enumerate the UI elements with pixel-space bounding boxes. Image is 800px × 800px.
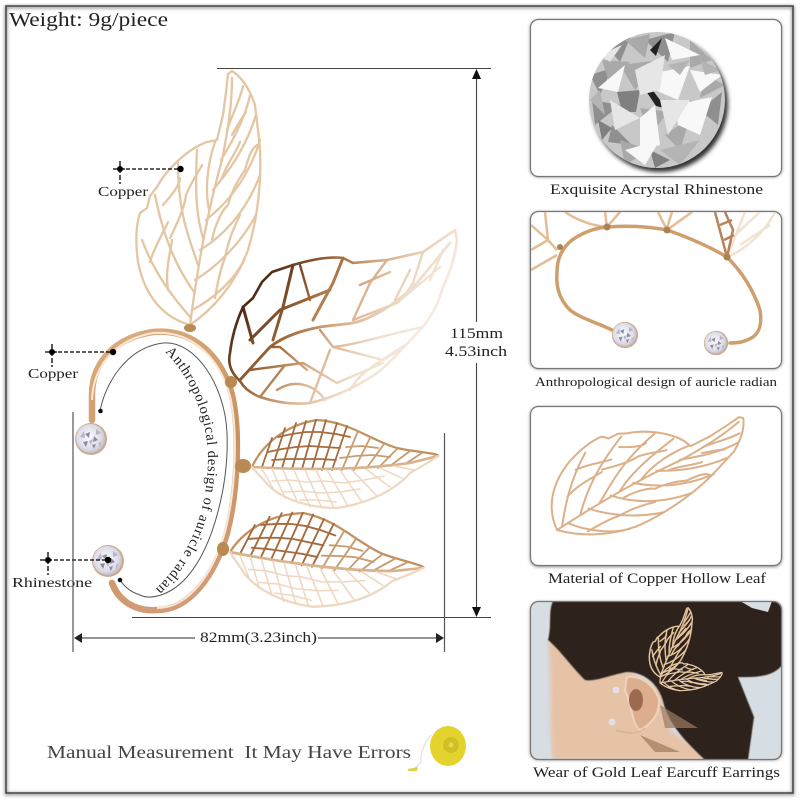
ring: highlight [92, 333, 235, 608]
product: leaf earcuff [75, 71, 457, 621]
caption: wearing photo: Wear of Gold Leaf Earcuff Earrings [533, 765, 780, 781]
dimension: width 82mm: 82mm(3.23inch) [200, 630, 317, 646]
caption: copper leaf: Material of Copper Hollow Leaf [548, 571, 766, 587]
stone: lower rhinestone [92, 545, 124, 577]
callout: copper band: Copper [28, 367, 78, 382]
dimension: height 115mm: 115mm [450, 326, 503, 342]
panel: rhinestone [530, 20, 782, 177]
dimension: height 115mm [132, 68, 508, 618]
image: ring close-up [531, 212, 775, 355]
dimension: height 115mm: 4.53inch [445, 344, 508, 360]
callout: copper band [28, 344, 116, 382]
ring: copper band [92, 332, 237, 610]
leaf: upper right, shaded [229, 230, 457, 404]
callout: copper leaf: Copper [98, 185, 148, 200]
callout: rhinestone [12, 552, 111, 591]
panel: copper leaf [528, 357, 782, 575]
radian guide line [100, 343, 227, 597]
panel: auricle design [530, 212, 782, 369]
callout: rhinestone: Rhinestone [12, 576, 92, 591]
leaf: top [136, 71, 260, 325]
leaf: lower [224, 504, 428, 621]
panel: wearing photo [530, 601, 782, 760]
caption: rhinestone: Exquisite Acrystal Rhinestone [550, 182, 763, 198]
note: measurement: Manual Measurement It May Have Errors [47, 742, 411, 762]
ring: leaf mounts [184, 324, 251, 556]
dimension: width 82mm [73, 412, 444, 652]
stone: upper rhinestone [75, 423, 107, 455]
callout: copper leaf [98, 161, 184, 200]
image: diamond [589, 32, 728, 172]
icon: tape measure [408, 726, 466, 771]
caption: auricle design: Anthropological design of auricle radian [535, 375, 778, 389]
radian guide end dots [98, 409, 122, 582]
curved text: radian: Anthropological design of auricle radian [156, 348, 218, 593]
leaf: lower middle [252, 420, 438, 508]
image: hollow leaf [528, 357, 759, 575]
heading: weight: Weight: 9g/piece [9, 9, 168, 31]
image: woman wearing earcuff [530, 601, 782, 760]
